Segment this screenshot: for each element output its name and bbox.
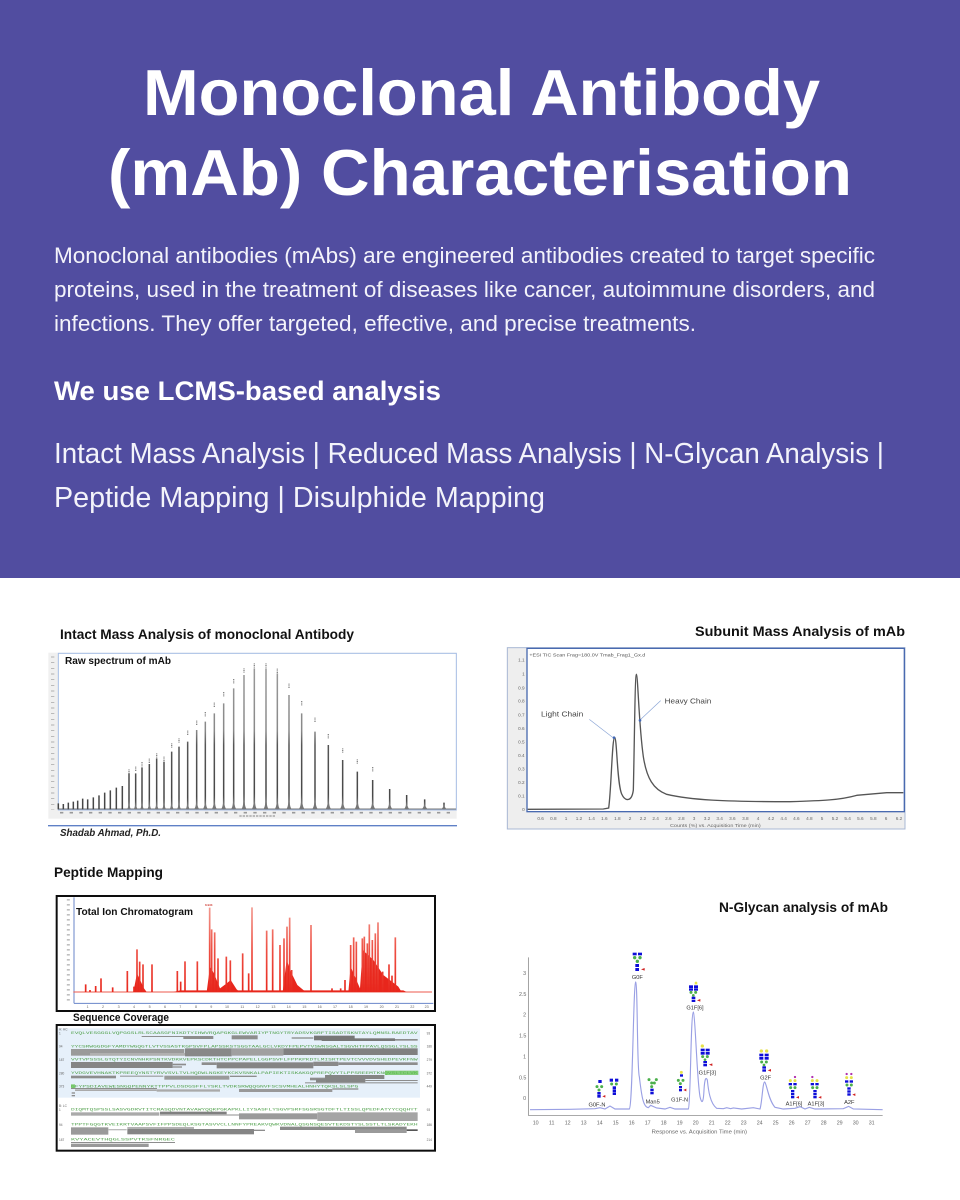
light chain sequence: TPPTFGQGTKVEIKRTVAAPSVFIFPPSDEQLKSGTASVVCLLNNFYPREAKVQWKVDNALQSGNSQESVTEKDSTYSLSSTLTLSKADYEKH (71, 1124, 418, 1128)
x-axis labels: 31 (869, 1120, 875, 1126)
x-axis labels: 18 (661, 1120, 667, 1126)
peak labels: A1F[6] (786, 1102, 803, 1108)
x-axis labels: 15 (302, 1005, 306, 1009)
panel: intact mass analysis (48, 626, 457, 839)
x-axis labels: 3 (693, 816, 696, 821)
panel: subunit mass analysis (507, 623, 905, 829)
light chain sequence (59, 1104, 432, 1147)
heavy chain sequence: YYCSRWGGDGFYAMDYWGQGTLVTVSSASTKGPSVFPLAPSSKSTSGGTAALGCLVKDYFPEPVTVSWNSGALTSGVHTFPAVLQSSGLYSLSS (71, 1045, 418, 1049)
x-axis labels: 13 (271, 1005, 275, 1009)
y-axis labels: 0.5 (518, 740, 525, 745)
y-axis labels: 3 (523, 971, 526, 977)
x-axis labels: 2 (629, 816, 632, 821)
y-axis labels: 0 (522, 807, 525, 812)
y-axis labels: 1 (522, 672, 525, 677)
x-axis labels: 4.4 (780, 816, 787, 821)
y-axis labels: 0.6 (518, 726, 525, 731)
x-axis labels: 3 (118, 1005, 120, 1009)
x-axis labels: 5.6 (857, 816, 864, 821)
callout: heavy chain: Heavy Chain (665, 698, 711, 705)
x-axis labels: 5.8 (870, 816, 877, 821)
x-axis labels: 28 (821, 1120, 827, 1126)
x-axis labels: 12 (256, 1005, 260, 1009)
chart: total ion chromatogram: 8.933 (205, 903, 213, 907)
chart: raw spectrum of mAb (48, 653, 457, 819)
x-axis labels: 7 (179, 1005, 181, 1009)
x-axis labels: 19 (677, 1120, 683, 1126)
x-axis labels: 17 (333, 1005, 337, 1009)
light chain sequence: B: LC (59, 1104, 68, 1108)
x-axis labels (533, 1120, 875, 1126)
peak labels: A2F (844, 1100, 855, 1106)
x-axis labels: 10 (533, 1120, 539, 1126)
x-axis labels: 22 (725, 1120, 731, 1126)
chart: sequence coverage map (57, 1025, 435, 1151)
x-axis labels: 26 (789, 1120, 795, 1126)
peak labels: G0F-N (589, 1103, 605, 1109)
y-axis labels: 0.8 (518, 699, 525, 704)
x-axis labels: 2 (102, 1005, 104, 1009)
x-axis labels: 14 (597, 1120, 603, 1126)
callout: heavy chain (639, 698, 711, 722)
x-axis labels: 16 (629, 1120, 635, 1126)
panel: N-glycan analysis (519, 899, 888, 1135)
text block: author credit: Shadab Ahmad, Ph.D. (60, 827, 161, 839)
x-axis labels: 2.2 (640, 816, 647, 821)
title: Monoclonal Antibody (143, 56, 820, 129)
y-axis labels: 2.5 (519, 992, 526, 998)
peak labels: G1F-N (671, 1097, 688, 1103)
x-axis labels: 18 (349, 1005, 353, 1009)
x-axis labels: 1.4 (588, 816, 595, 821)
x-axis labels: 6.2 (896, 816, 903, 821)
heavy chain sequence: 280 (59, 1071, 65, 1075)
x-axis labels: 3.4 (716, 816, 723, 821)
callout: light chain: Light Chain (541, 711, 583, 718)
heading: sequence coverage: Sequence Coverage (73, 1012, 169, 1024)
chart: subunit chromatogram: +ESI TIC Scan Frag=180.0V Tmab_Frag1_Gx.d (529, 653, 646, 658)
light chain sequence: 186 (427, 1123, 432, 1127)
peak labels: Man5 (646, 1099, 660, 1105)
icon: glycan G1F-N (677, 1071, 686, 1091)
text block: introduction: proteins, used in the treatment of diseases like cancer, autoimmune disorders, and (54, 277, 875, 302)
chart: N-glycan chromatogram (519, 953, 883, 1135)
x-axis labels: 2.8 (678, 816, 685, 821)
x-axis labels: 8 (195, 1005, 197, 1009)
icon: glycan A1F[6] (789, 1076, 799, 1099)
x-axis labels (87, 1005, 429, 1009)
x-axis labels: 10 (225, 1005, 229, 1009)
heavy chain sequence: 449 (427, 1085, 432, 1089)
peak labels: A1F[3] (808, 1102, 825, 1108)
x-axis labels: 9 (210, 1005, 212, 1009)
heading: peptide mapping: Peptide Mapping (54, 864, 163, 880)
x-axis labels: 6 (885, 816, 888, 821)
light chain sequence: KVYACEVTHQGLSSPVTKSFNRGEC (71, 1139, 175, 1143)
x-axis labels: 23 (425, 1005, 429, 1009)
text block: list of analyses: Peptide Mapping | Disulphide Mapping (54, 482, 545, 514)
x-axis labels: 1 (565, 816, 568, 821)
y-axis labels: 0.3 (518, 767, 525, 772)
x-axis labels: 3.2 (704, 816, 711, 821)
x-axis labels: 0.6 (537, 816, 544, 821)
icon: glycan G2F (759, 1049, 771, 1072)
x-axis labels: 11 (549, 1120, 554, 1126)
callout: light chain (541, 711, 615, 739)
text block: list of analyses (54, 438, 884, 514)
x-axis labels: 12 (565, 1120, 571, 1126)
x-axis labels: 21 (395, 1005, 399, 1009)
x-axis labels: 23 (741, 1120, 747, 1126)
x-axis labels: 2.6 (665, 816, 672, 821)
x-axis labels: 27 (805, 1120, 811, 1126)
icon: glycan Man5 (647, 1078, 658, 1094)
y-axis labels: 1 (523, 1054, 526, 1060)
x-axis labels: 19 (364, 1005, 368, 1009)
title: (mAb) Characterisation (108, 136, 852, 209)
label: total ion chromatogram: Total Ion Chromatogram (76, 906, 193, 918)
heavy chain sequence: 372 (427, 1071, 432, 1075)
heavy chain sequence: 187 (59, 1058, 65, 1062)
icon: glycan G1F[3] (701, 1044, 712, 1066)
x-axis labels: 1.2 (576, 816, 583, 821)
text block: introduction: infections. They offer targeted, effective, and precise treatments. (54, 311, 696, 336)
x-axis labels: 6 (164, 1005, 166, 1009)
x-axis labels: 29 (837, 1120, 843, 1126)
y-axis labels: 0.5 (519, 1075, 526, 1081)
icon: glycan G0F (633, 953, 645, 971)
x-axis labels: 3.6 (729, 816, 736, 821)
y-axis labels: 2 (523, 1013, 526, 1019)
heavy chain sequence: GFYPSDIAVEWESNGQPENNYKTTPPVLDSDGSFFLYSKLTVDKSRWQQGNVFSCSVMHEALHNHYTQKSLSLSPG (71, 1085, 358, 1089)
peak labels (589, 975, 855, 1109)
heading: intact mass analysis: Intact Mass Analysis of monoclonal Antibody (60, 626, 354, 642)
x-axis labels: 1.8 (614, 816, 621, 821)
x-axis labels: 30 (853, 1120, 859, 1126)
heading: LCMS analysis: We use LCMS-based analysis (54, 376, 441, 406)
panel: peptide mapping (54, 864, 435, 1151)
heavy chain sequence: YVDGVEVHNAKTKPREEQYNSTYRVVSVLTVLHQDWLNGKEYKCKVSNKALPAPIEKTISKAKGQPREPQVYTLPPSREEMTKNQVSLTCLVK (71, 1072, 419, 1076)
icon: glycan A2F (845, 1073, 855, 1096)
heavy chain sequence: 93 (427, 1031, 430, 1035)
heavy chain sequence: VVTVPSSSLGTQTYICNVNHKPSNTKVDKKVEPKSCDKTHTCPPCPAPELLGGPSVFLFPPKPKDTLMISRTPEVTCVVVDVSHEDPEVKFNW (71, 1059, 419, 1063)
x-axis labels: 20 (693, 1120, 699, 1126)
icon: glycan G0F-N (595, 1080, 605, 1098)
x-axis labels: 3.8 (742, 816, 749, 821)
chart: subunit chromatogram: Counts (%) vs. Acquisition Time (min) (670, 823, 761, 828)
heavy chain sequence: 279 (427, 1058, 432, 1062)
light chain sequence: 214 (427, 1138, 432, 1142)
x-axis labels: 4.8 (806, 816, 813, 821)
y-axis labels (518, 658, 525, 812)
x-axis labels: 20 (380, 1005, 384, 1009)
light chain sequence: 94 (59, 1123, 63, 1127)
x-axis labels: 24 (757, 1120, 763, 1126)
x-axis labels (537, 816, 903, 821)
heavy chain sequence (59, 1027, 432, 1096)
x-axis labels: 22 (410, 1005, 414, 1009)
y-axis labels: 0.1 (518, 793, 525, 798)
x-axis labels: 1 (87, 1005, 89, 1009)
x-axis labels: 25 (773, 1120, 779, 1126)
text block: list of analyses: Intact Mass Analysis | Reduced Mass Analysis | N-Glycan Analysis | (54, 438, 884, 470)
peak labels: G1F[3] (699, 1070, 716, 1076)
x-axis labels: 0.8 (550, 816, 557, 821)
y-axis labels: 0.7 (518, 712, 525, 717)
x-axis labels: 15 (613, 1120, 619, 1126)
x-axis labels: 4.6 (793, 816, 800, 821)
x-axis labels: 5.2 (832, 816, 839, 821)
heavy chain sequence: 186 (427, 1045, 432, 1049)
light chain sequence: DIQMTQSPSSLSASVGDRVTITCRASQDVNTAVAWYQQKPGKAPKLLIYSASFLYSGVPSRFSGSRSGTDFTLTISSLQPEDFATYYCQQHYT (71, 1109, 418, 1113)
x-axis labels: 4 (133, 1005, 135, 1009)
icon: glycan G1F[6] (689, 982, 700, 1002)
x-axis labels: 21 (709, 1120, 715, 1126)
panel: purple header (0, 0, 960, 578)
y-axis labels: 0.2 (518, 780, 525, 785)
y-axis labels: 0.9 (518, 685, 525, 690)
x-axis labels: 17 (645, 1120, 651, 1126)
label: raw spectrum: Raw spectrum of mAb (65, 655, 171, 667)
heavy chain sequence: 373 (59, 1085, 65, 1089)
x-axis labels: 13 (581, 1120, 587, 1126)
x-axis labels: 5 (821, 816, 824, 821)
light chain sequence: 1 (59, 1108, 61, 1112)
y-axis labels: 0 (523, 1096, 526, 1102)
heavy chain sequence: H: HC (59, 1027, 68, 1031)
heading: N-glycan analysis: N-Glycan analysis of mAb (719, 899, 888, 915)
light chain sequence: 187 (59, 1138, 65, 1142)
x-axis labels: 5.4 (844, 816, 851, 821)
heavy chain sequence: 94 (59, 1045, 63, 1049)
x-axis labels: 16 (318, 1005, 322, 1009)
x-axis labels: 14 (287, 1005, 291, 1009)
y-axis labels: 1.5 (519, 1034, 526, 1040)
x-axis labels: 4.2 (768, 816, 775, 821)
y-axis labels: 1.1 (518, 658, 525, 663)
chart: subunit chromatogram (507, 648, 905, 829)
x-axis labels: 4 (757, 816, 760, 821)
heavy chain sequence: EVQLVESGGGLVQPGGSLRLSCAASGFNIKDTYIHWVRQAPGKGLEWVARIYPTNGYTRYADSVKGRFTISADTSKNTAYLQMNSLRAEDTAV (71, 1032, 419, 1036)
x-axis labels: 2.4 (652, 816, 659, 821)
text block: introduction: Monoclonal antibodies (mAbs) are engineered antibodies created to target specific (54, 243, 875, 268)
heading: subunit mass analysis: Subunit Mass Analysis of mAb (695, 623, 905, 639)
x-axis labels: 5 (149, 1005, 151, 1009)
peak labels: G2F (760, 1076, 772, 1082)
peak labels: G1F[6] (686, 1006, 704, 1012)
y-axis labels: 0.4 (518, 753, 525, 758)
x-axis labels: 11 (240, 1005, 244, 1009)
y-axis labels (519, 971, 526, 1102)
x-axis labels: 1.6 (601, 816, 608, 821)
light chain sequence: 93 (427, 1108, 430, 1112)
peak labels: G0F (632, 975, 643, 981)
chart: N-glycan chromatogram: Response vs. Acquisition Time (min) (652, 1129, 747, 1135)
heavy chain sequence: 1 (59, 1031, 61, 1035)
icon: glycan core (610, 1079, 618, 1095)
icon: glycan A1F[3] (811, 1076, 821, 1099)
text block: introduction (54, 243, 875, 336)
title (108, 56, 852, 209)
chart: total ion chromatogram (57, 896, 435, 1011)
